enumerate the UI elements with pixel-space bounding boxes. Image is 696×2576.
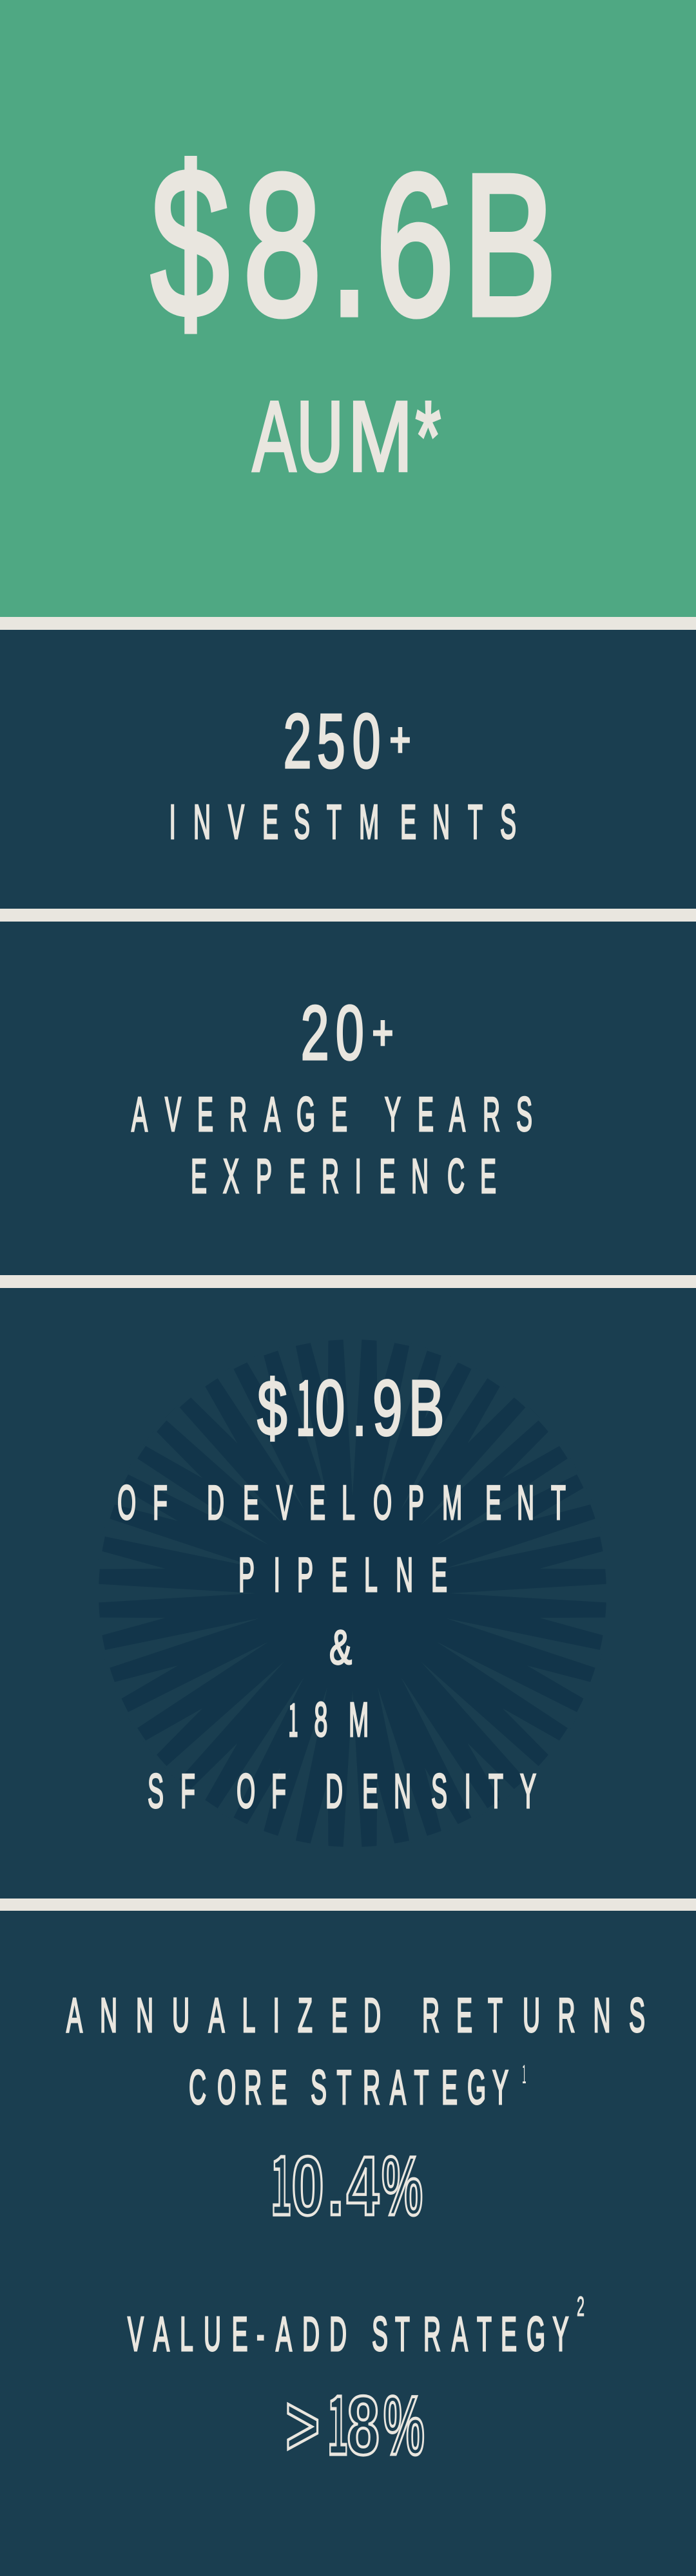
big number: $8.6B: 8.6B (243, 133, 557, 357)
label: average years experience: EXPERIENCE (191, 1149, 496, 1203)
figure: >18%: 8 (347, 2378, 380, 2472)
figure: >18%: 1 (327, 2362, 349, 2477)
figure: 10.4%: 0.4 (291, 2139, 379, 2233)
label: sf of density: SF OF DENSITY (148, 1764, 536, 1818)
label: investments: INVESTMENTS (169, 795, 516, 849)
heading: annualized returns: ANNUALIZED RETURNS (66, 1988, 645, 2042)
label: average years experience (131, 1087, 532, 1203)
figure: 10.4%: % (382, 2140, 423, 2233)
label: of development pipelne (117, 1475, 566, 1602)
number: 20+: 20 (301, 989, 364, 1076)
label: core strategy: CORE STRATEGY (189, 2060, 508, 2114)
label: AUM*: * (416, 381, 441, 492)
number: $10.9B: $ (257, 1365, 287, 1452)
label: of development pipelne: OF DEVELOPMENT (117, 1475, 566, 1530)
label: core strategy: 1 (522, 2054, 527, 2091)
label: 18M: 8M (314, 1692, 369, 1747)
panel: assets under management (0, 0, 696, 617)
icon: sunburst (96, 1337, 609, 1850)
number: $10.9B (257, 1348, 445, 1457)
label: AUM*: AU (253, 381, 343, 492)
label: 18M (288, 1685, 369, 1750)
number: 20+: + (372, 1006, 393, 1060)
panel: annualized returns (0, 1911, 696, 2576)
number: $10.9B: 0.9B (315, 1365, 445, 1452)
label: of development pipelne: PIPELNE (238, 1548, 447, 1602)
figure: >18%: % (383, 2380, 425, 2473)
label: ampersand: & (329, 1620, 352, 1674)
number: 250+: 250 (284, 697, 381, 784)
label: AUM*: M (348, 381, 412, 492)
number: 20+ (301, 989, 393, 1076)
label: value-add strategy: VALUE-ADD STRATEGY (128, 2307, 569, 2361)
figure: 10.4%: 1 (271, 2122, 292, 2238)
panel: development pipeline (0, 1288, 696, 1899)
panel: experience (0, 922, 696, 1275)
figure: >18% (285, 2362, 425, 2477)
label: 18M: 1 (288, 1685, 298, 1750)
number: $10.9B: 1 (296, 1348, 314, 1457)
label: value-add strategy: 2 (577, 2291, 585, 2322)
panel: investments (0, 630, 696, 909)
figure: >18%: > (285, 2378, 320, 2472)
number: 250+: + (390, 713, 411, 767)
big number: $8.6B: $ (151, 125, 229, 362)
label: AUM* (253, 381, 441, 492)
label: average years experience: AVERAGE YEARS (131, 1087, 532, 1141)
figure: 10.4% (271, 2122, 423, 2238)
